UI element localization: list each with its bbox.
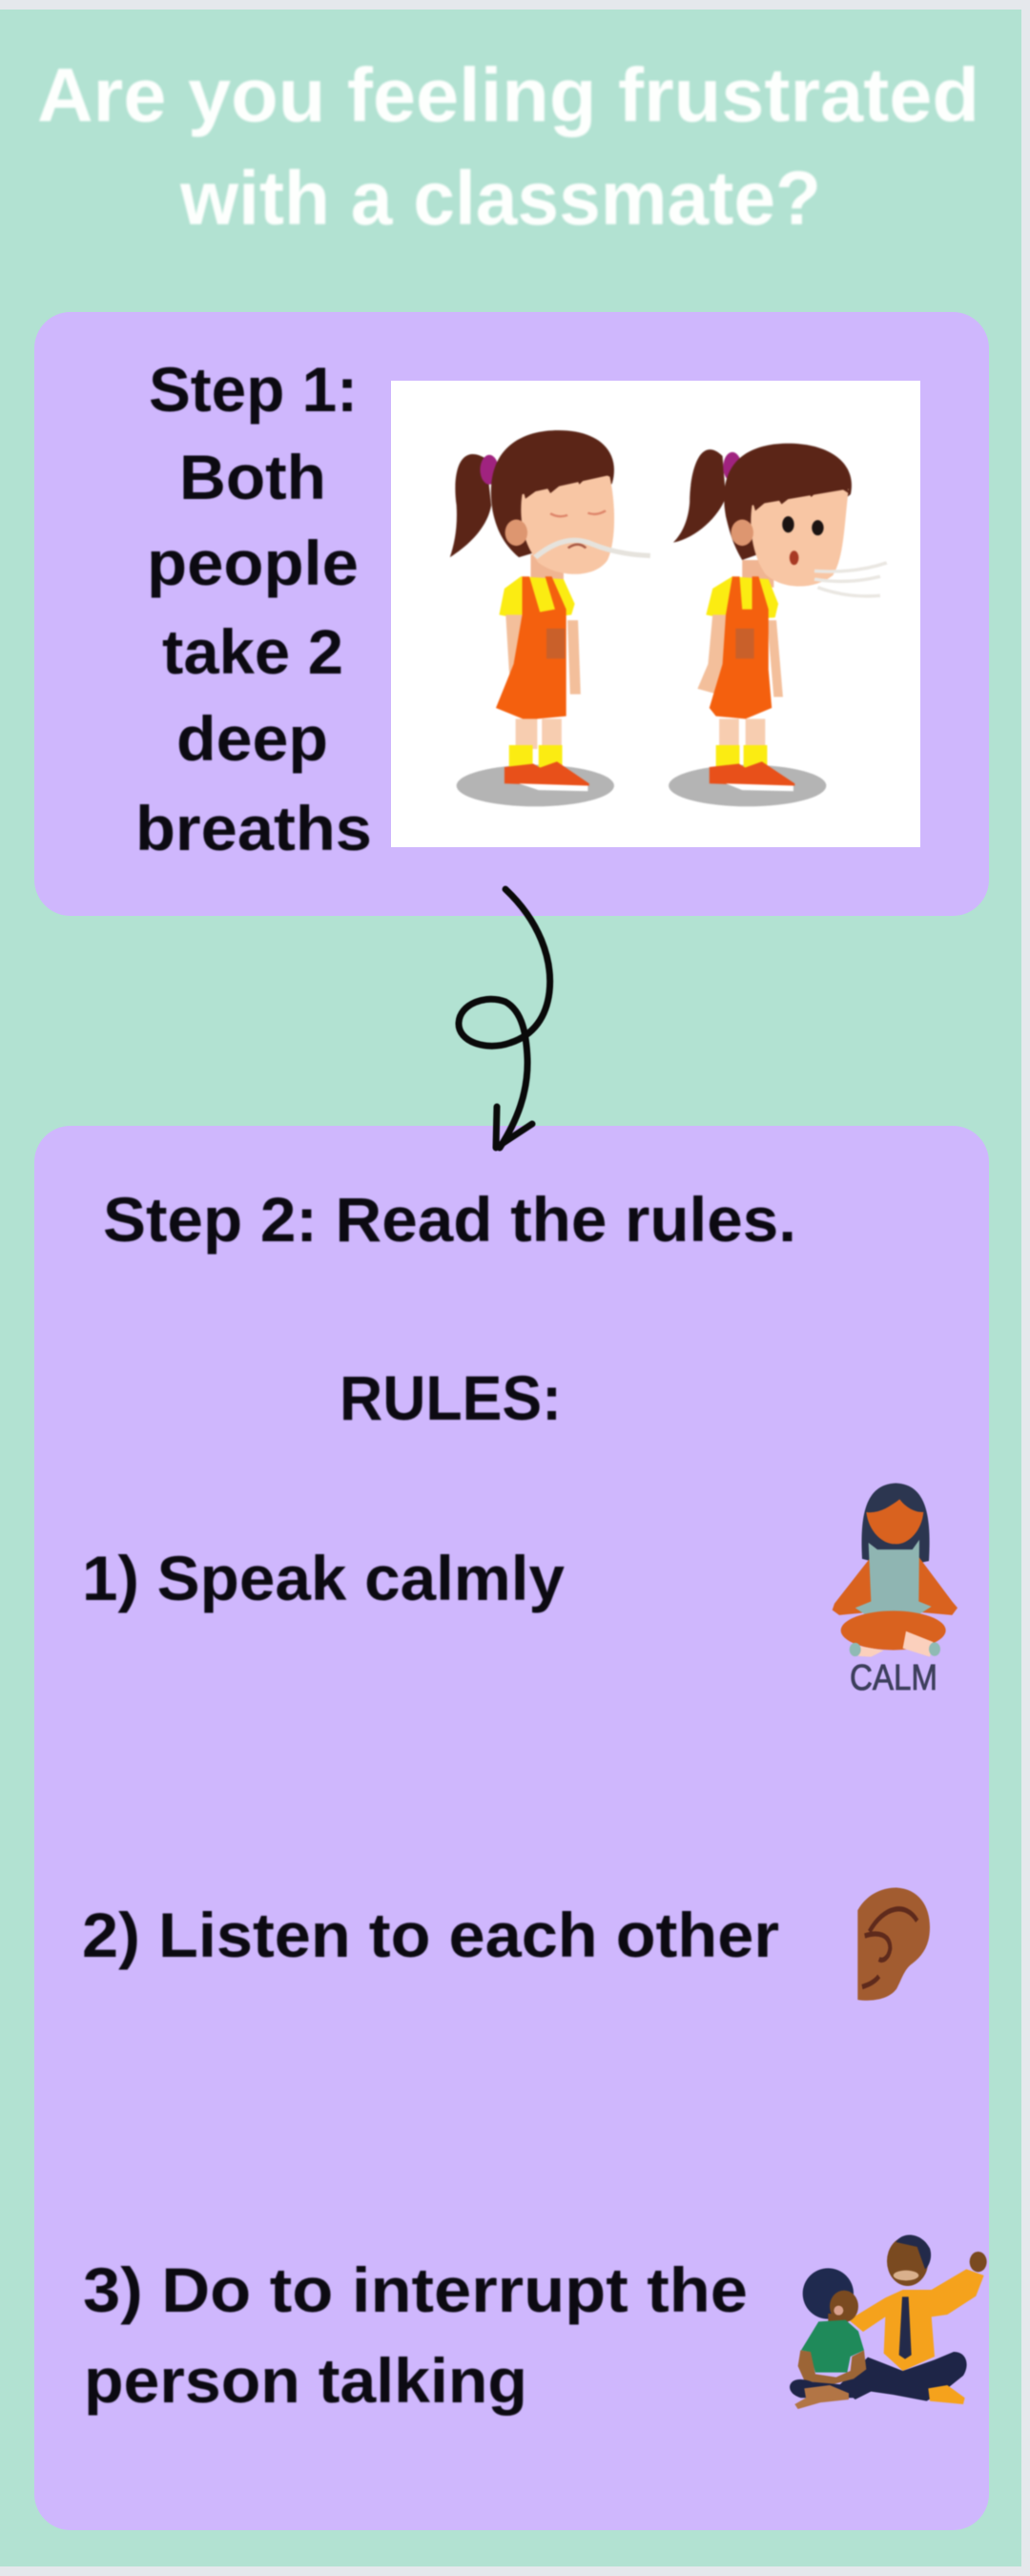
rule 3 text bbox=[83, 2254, 748, 2416]
rule 2 text: 2) Listen to each other bbox=[82, 1900, 779, 1970]
rule 3 text: person talking bbox=[84, 2345, 527, 2416]
step 1 text: Step 1: bbox=[149, 354, 358, 425]
girl exhaling bbox=[669, 444, 887, 806]
step 1 text: people bbox=[147, 528, 359, 598]
step 1 text: breaths bbox=[135, 793, 372, 863]
step 2 heading: Step 2: Read the rules. bbox=[103, 1184, 796, 1255]
panel: step 1 bbox=[34, 312, 989, 916]
arrow: curly connector from step 1 to step 2 bbox=[459, 889, 550, 1148]
girl inhaling bbox=[450, 430, 650, 806]
title: with a classmate? bbox=[179, 156, 821, 240]
title: Are you feeling frustrated bbox=[37, 52, 979, 137]
rules heading: RULES: bbox=[340, 1362, 562, 1433]
step 1 text bbox=[135, 354, 372, 863]
icon: adult and child talking bbox=[790, 2234, 987, 2409]
rule 3 text: 3) Do to interrupt the bbox=[83, 2254, 748, 2325]
step 1 text: deep bbox=[176, 703, 328, 774]
panel: step 2 rules bbox=[34, 1126, 989, 2530]
calm label: CALM bbox=[850, 1658, 937, 1698]
rule 1 text: 1) Speak calmly bbox=[82, 1543, 565, 1613]
icon: ear bbox=[857, 1888, 930, 2001]
step 1 text: Both bbox=[179, 442, 326, 512]
image: two girls breathing bbox=[391, 381, 920, 847]
title bbox=[37, 52, 979, 240]
step 1 text: take 2 bbox=[162, 616, 343, 687]
icon: calm meditating girl bbox=[833, 1483, 958, 1698]
